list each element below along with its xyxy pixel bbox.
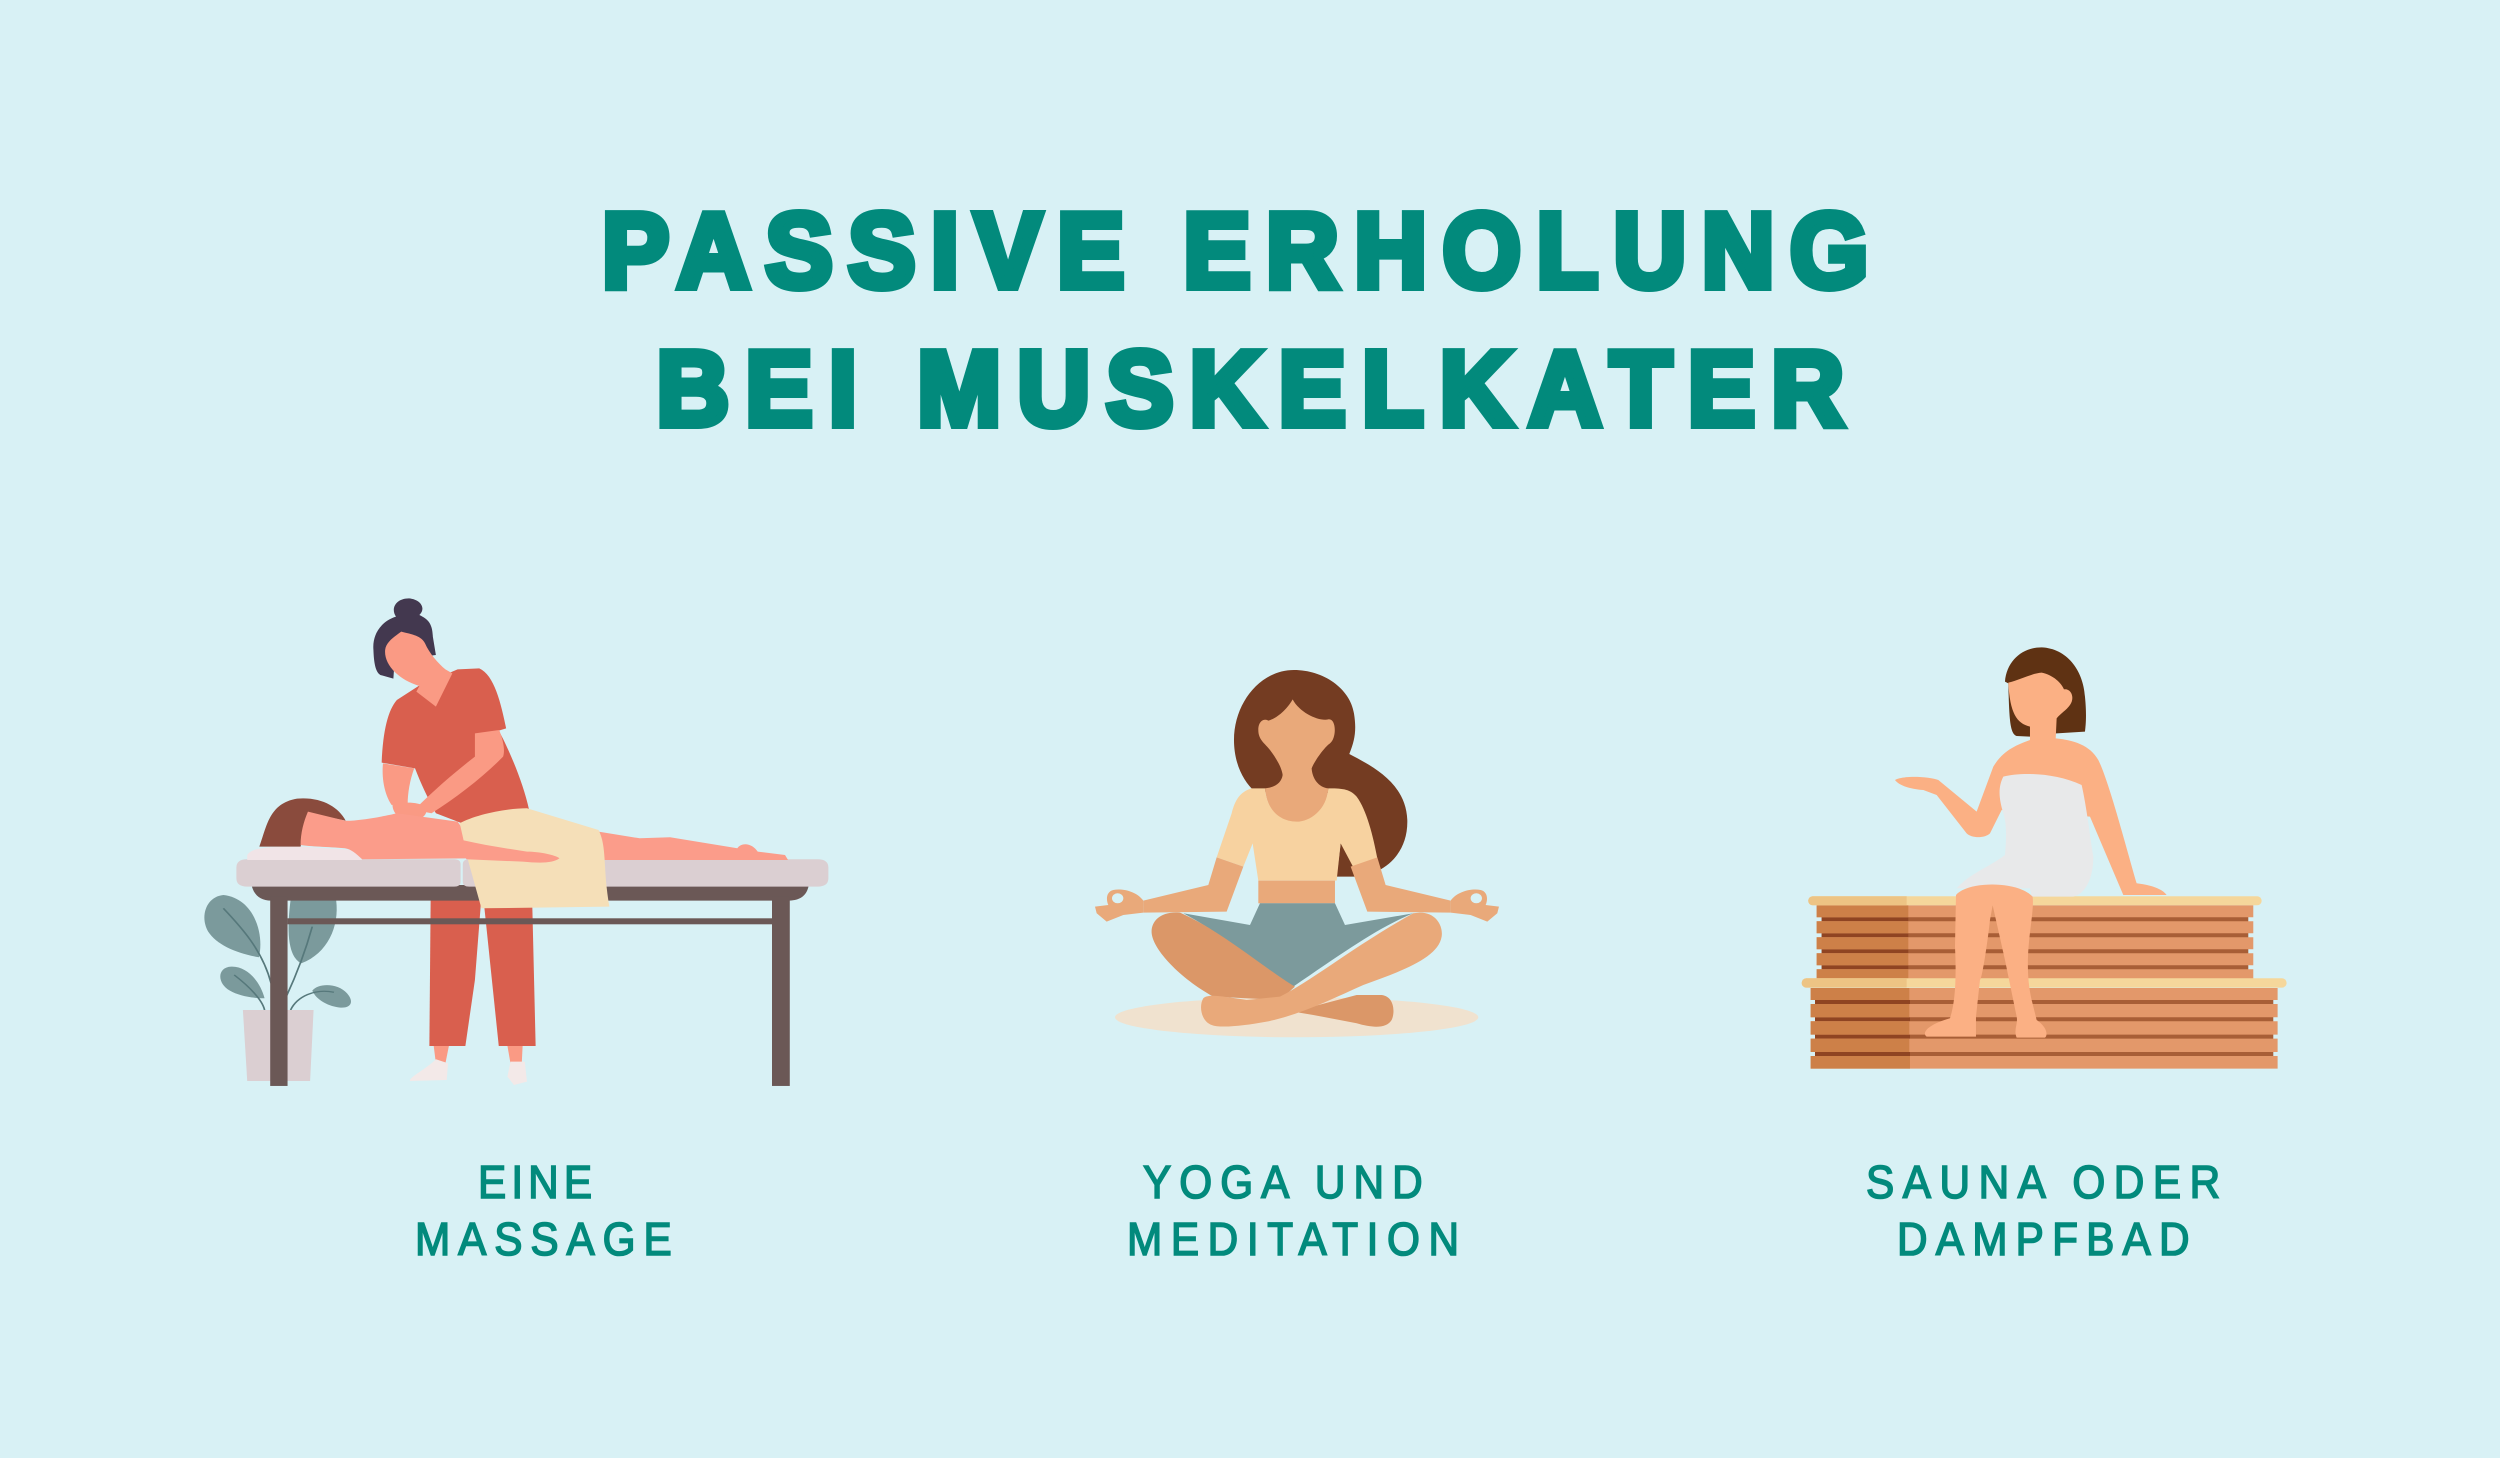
head and neck bbox=[1258, 699, 1335, 823]
illustration: massage bbox=[204, 598, 828, 1086]
midriff bbox=[1258, 881, 1335, 903]
masseuse trousers and shoes bbox=[410, 897, 536, 1085]
client lying on table bbox=[247, 798, 788, 908]
label: yoga: MEDITATION bbox=[1127, 1214, 1459, 1265]
shorts bbox=[1183, 903, 1413, 987]
icon: potted plant bbox=[204, 895, 351, 1081]
label: sauna: DAMPFBAD bbox=[1897, 1214, 2190, 1265]
sauna benches bbox=[1802, 896, 2287, 1069]
long hair bbox=[1234, 670, 1407, 877]
title: PASSIVE ERHOLUNG bbox=[602, 191, 1868, 310]
massage table bbox=[236, 859, 828, 1086]
label: sauna bbox=[1866, 1157, 2220, 1265]
left arm with mudra hand bbox=[1095, 857, 1243, 922]
crop top bbox=[1217, 788, 1377, 881]
right arm with mudra hand bbox=[1351, 857, 1499, 922]
label: massage bbox=[415, 1157, 672, 1265]
label: yoga bbox=[1127, 1157, 1459, 1265]
label: yoga: YOGA UND bbox=[1143, 1157, 1423, 1208]
woman in towel bbox=[1895, 647, 2167, 1038]
illustration: yoga bbox=[1095, 670, 1499, 1037]
crossed legs bbox=[1152, 912, 1442, 1027]
masseuse upper body bbox=[373, 598, 529, 823]
label: massage: MASSAGE bbox=[415, 1214, 672, 1265]
floor mat bbox=[1115, 997, 1478, 1037]
label: sauna: SAUNA ODER bbox=[1866, 1157, 2220, 1208]
title: BEI MUSKELKATER bbox=[656, 329, 1844, 448]
title bbox=[602, 191, 1868, 448]
illustration: sauna bbox=[1802, 647, 2287, 1069]
label: massage: EINE bbox=[478, 1157, 592, 1208]
